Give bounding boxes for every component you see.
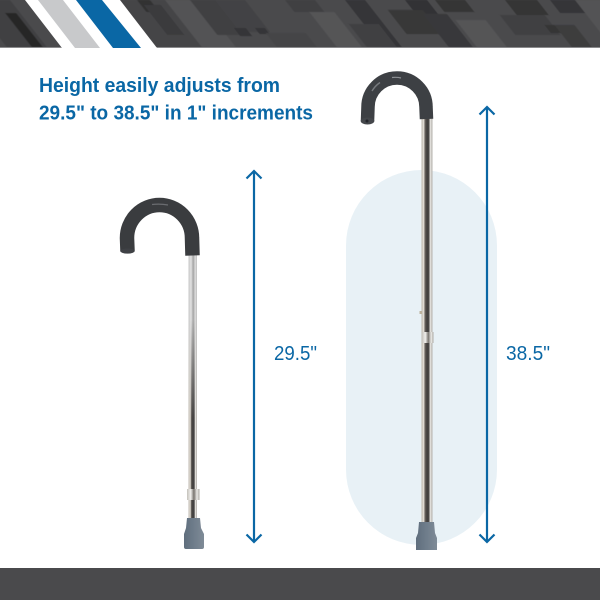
header stripes [25,0,157,48]
heading [39,75,313,124]
tall cane handle grip [361,77,426,124]
tall cane shaft [422,118,432,524]
heading: 29.5" to 38.5" in 1" increments [39,102,313,124]
short cane rubber tip [184,518,204,549]
short cane collar [187,489,200,500]
tall cane collar [422,332,434,343]
tall cane rubber tip [416,522,437,550]
tall cane adjustment pin [420,311,422,314]
tall height arrow [480,107,494,542]
short cane handle grip [120,204,192,256]
pale background pill [346,170,497,545]
bottom bar [0,568,600,600]
tall height label: 38.5" [506,342,550,365]
heading: Height easily adjusts from [39,75,280,97]
short cane shaft [188,254,197,520]
short height arrow [246,171,262,542]
header banner [0,0,600,48]
short cane [120,204,204,549]
tall cane [361,77,437,550]
short height label: 29.5" [274,342,317,365]
